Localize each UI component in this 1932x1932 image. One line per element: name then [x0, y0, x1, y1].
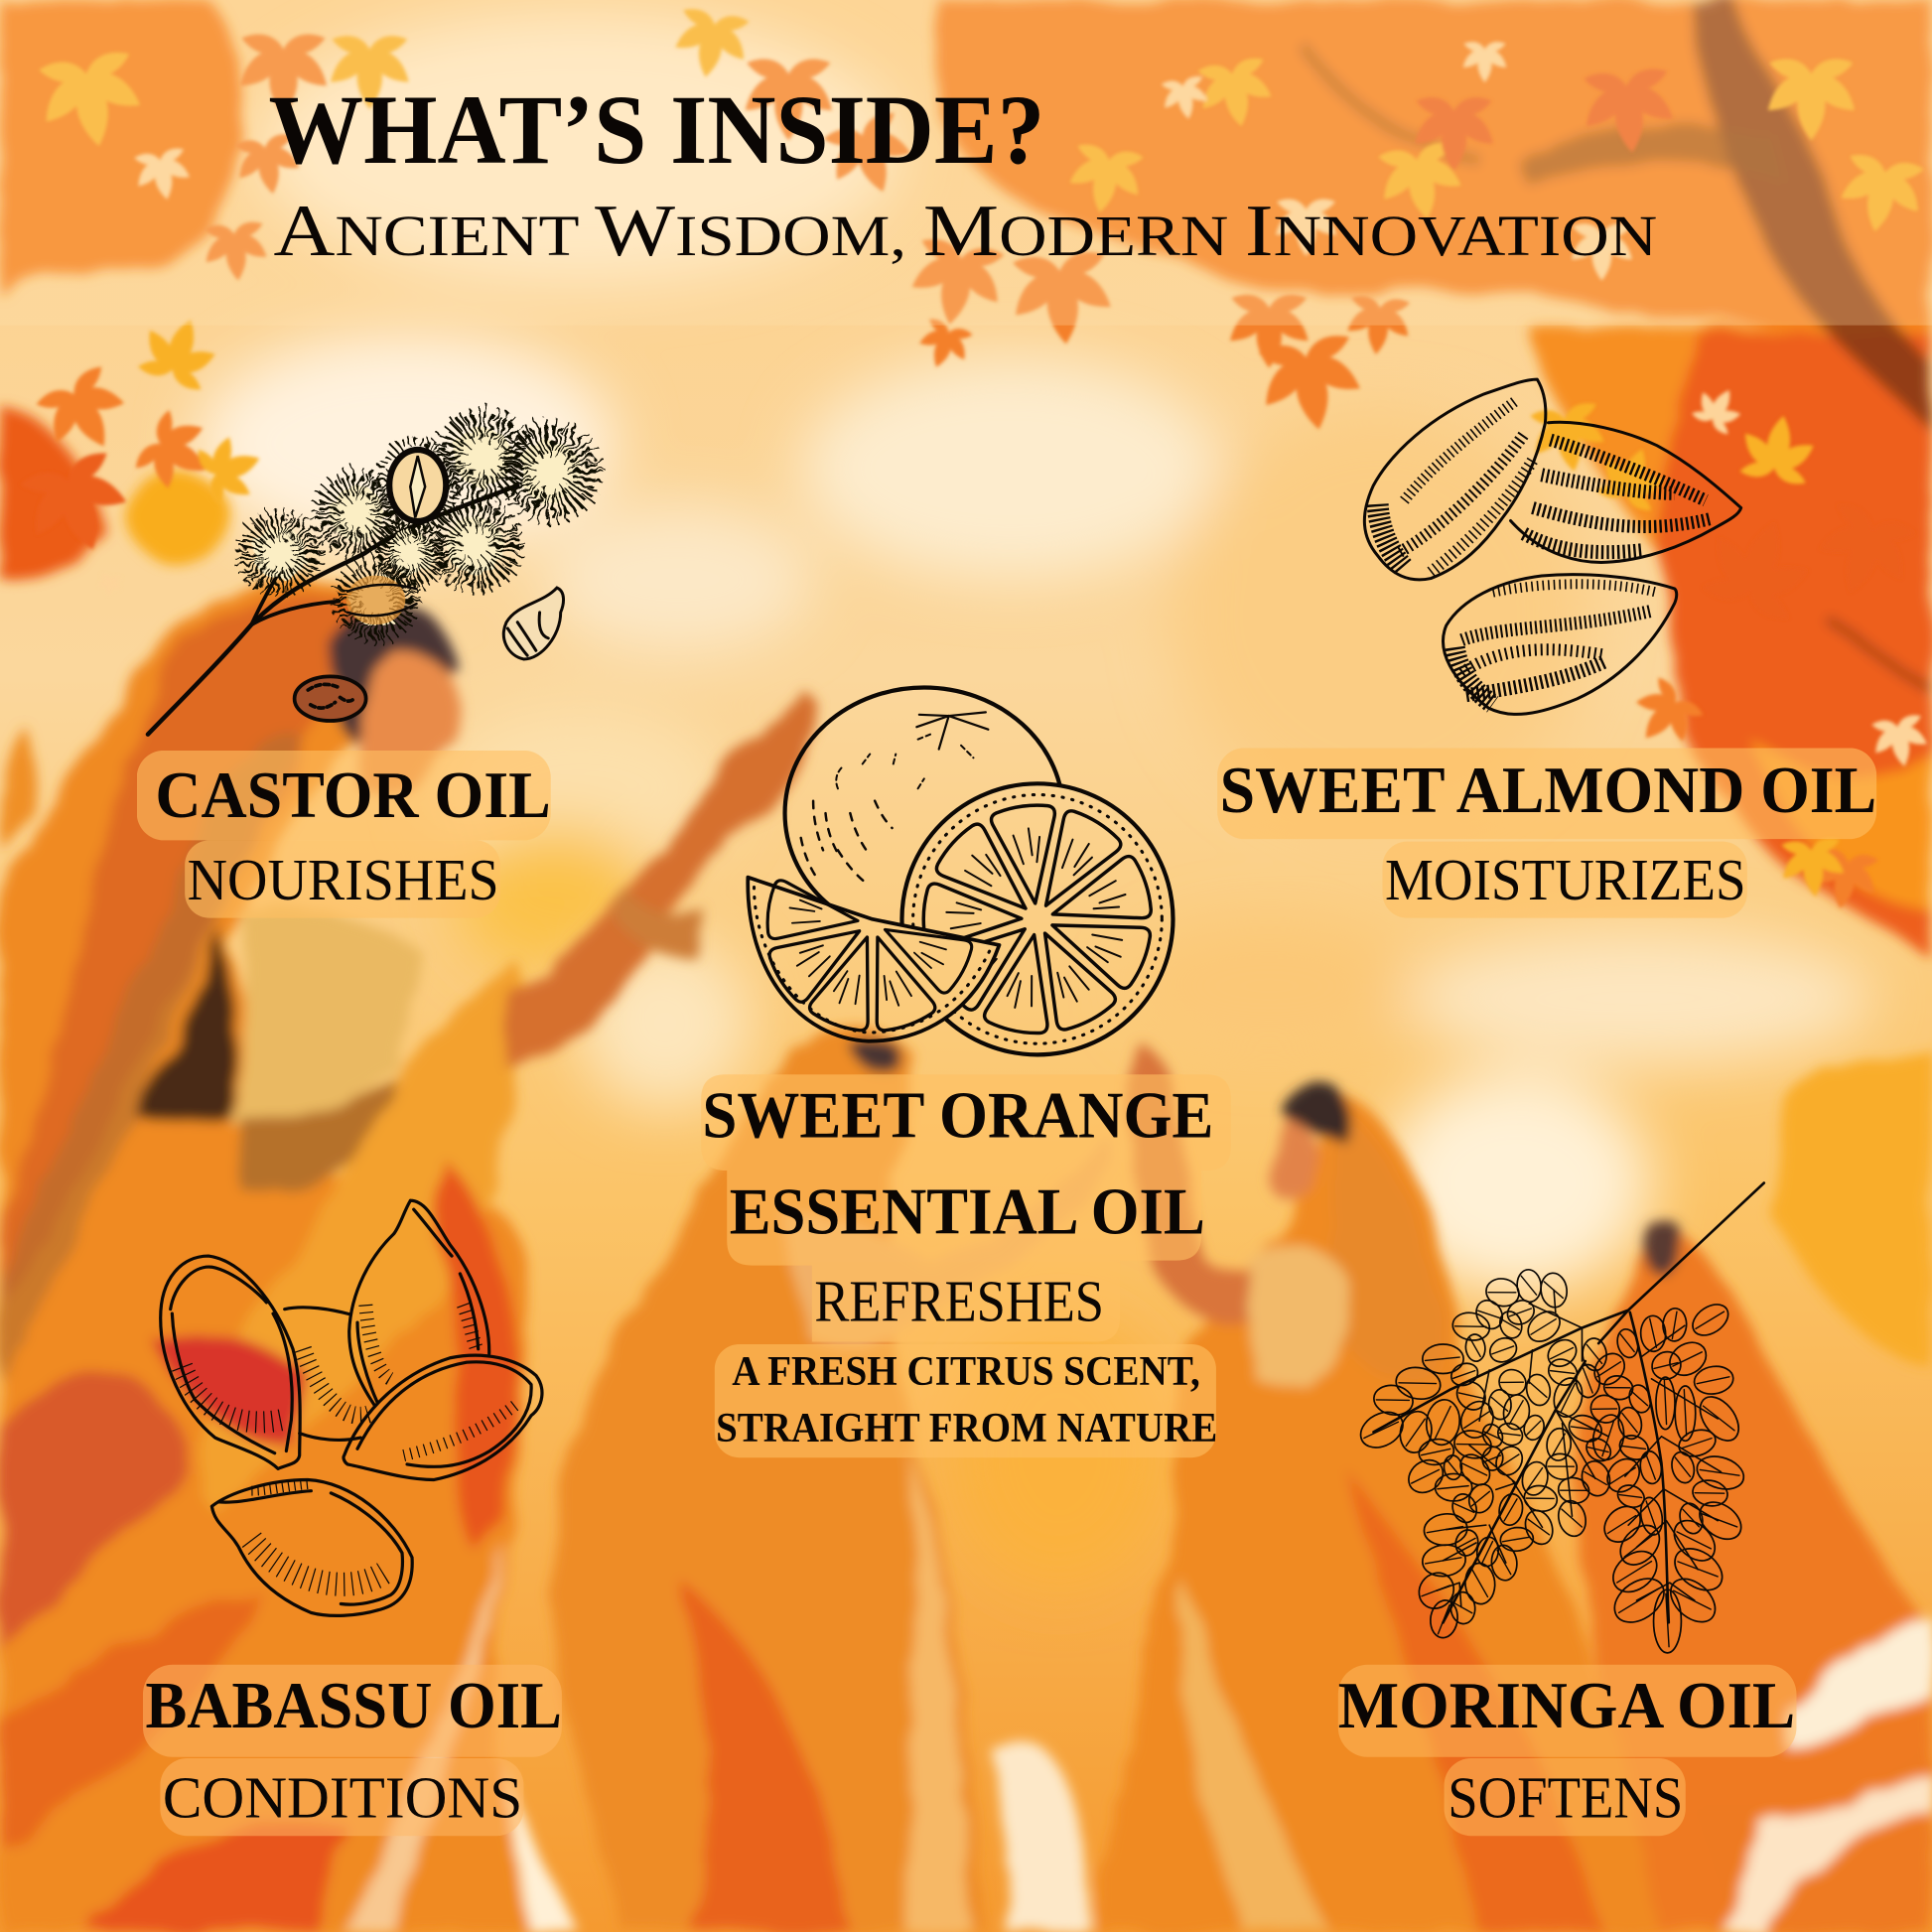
label pill: benefit: [185, 840, 500, 918]
right figure arm: [1126, 1044, 1251, 1324]
left figure arm: [505, 692, 819, 1069]
title: WHAT’S INSIDE?: [269, 76, 1044, 185]
header band: [0, 0, 1932, 326]
panel: babassu oil: [143, 1200, 562, 1836]
subtitle: ANCIENT WISDOM, MODERN INNOVATION: [274, 191, 1657, 272]
label pill: name: [1338, 1665, 1796, 1757]
heading: SWEET ALMOND OIL: [1220, 754, 1876, 827]
benefit text: NOURISHES: [188, 847, 499, 912]
icon: almonds: [1364, 379, 1741, 714]
icon: babassu kernels: [161, 1200, 542, 1615]
panel: sweet almond oil: [1217, 379, 1876, 918]
center figure: [552, 1028, 986, 1932]
benefit text: REFRESHES: [814, 1268, 1104, 1333]
orange slice: [901, 783, 1173, 1054]
label pill: name: [137, 751, 551, 840]
label pill: benefit: [160, 1758, 523, 1836]
seed: [503, 588, 564, 659]
icon: moringa branch: [1358, 1183, 1764, 1653]
heading line two: ESSENTIAL OIL: [730, 1174, 1205, 1248]
scent note line two: STRAIGHT FROM NATURE: [716, 1405, 1217, 1451]
bottom streaks: [1787, 1614, 1932, 1749]
sky washes: [198, 12, 1872, 1589]
benefit text: MOISTURIZES: [1385, 847, 1746, 912]
label pill: benefit: [1445, 1758, 1686, 1836]
benefit text: CONDITIONS: [163, 1765, 522, 1831]
left figure head: [332, 602, 459, 743]
orange half wedge: [748, 878, 1000, 1041]
left figure sari: [0, 579, 530, 1932]
falling and hanging leaves: [8, 2, 1932, 914]
heading line one: SWEET ORANGE: [702, 1079, 1213, 1153]
panel: moringa oil: [1338, 1183, 1796, 1836]
label pill: benefit: [1382, 842, 1747, 918]
panel: castor oil: [137, 413, 597, 918]
heading: BABASSU OIL: [145, 1669, 562, 1742]
whole orange: [782, 685, 1062, 903]
right figure: [1097, 1094, 1657, 1932]
scent note line one: A FRESH CITRUS SCENT,: [732, 1348, 1200, 1395]
nut: [295, 676, 366, 721]
label pills: [701, 1074, 1231, 1457]
label pill: name: [143, 1665, 562, 1757]
icon: orange: [748, 688, 1173, 1054]
heading: MORINGA OIL: [1338, 1669, 1795, 1742]
panel: sweet orange essential oil: [701, 688, 1231, 1457]
far right figure: [1576, 1230, 1932, 1932]
heading: CASTOR OIL: [155, 759, 551, 832]
icon: castor branch: [148, 413, 597, 735]
benefit text: SOFTENS: [1448, 1765, 1683, 1831]
label pill: name: [1217, 748, 1876, 839]
